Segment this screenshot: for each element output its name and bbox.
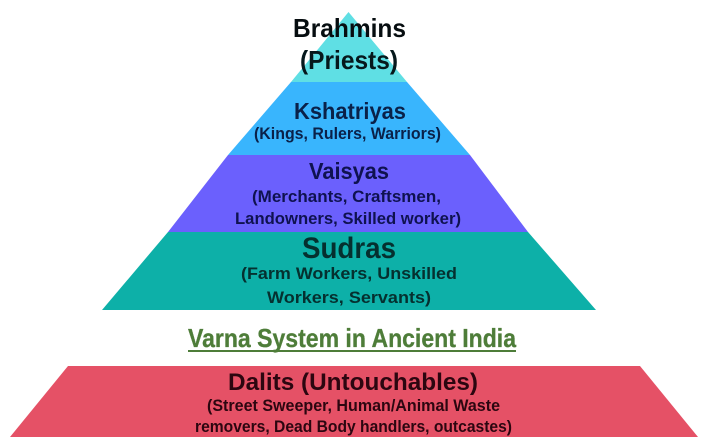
pyramid tier: Kshatriyas	[228, 82, 470, 155]
separate tier: Dalits: (Street Sweeper, Human/Animal Waste	[207, 397, 500, 415]
separate tier: Dalits: Dalits (Untouchables)	[228, 369, 478, 396]
pyramid tier: Brahmins: (Priests)	[300, 45, 398, 75]
pyramid tier: Vaisyas: (Merchants, Craftsmen,	[252, 188, 441, 206]
pyramid tier: Kshatriyas: (Kings, Rulers, Warriors)	[254, 125, 441, 143]
pyramid tier: Vaisyas: Landowners, Skilled worker)	[235, 210, 461, 228]
pyramid tier: Sudras: Sudras	[302, 232, 396, 265]
pyramid tier: Vaisyas: Vaisyas	[309, 158, 389, 184]
pyramid tier: Kshatriyas: Kshatriyas	[294, 98, 406, 124]
pyramid tier: Sudras: Workers, Servants)	[267, 288, 431, 307]
separate tier: Dalits	[10, 366, 698, 437]
pyramid tier: Brahmins: Brahmins	[293, 13, 406, 43]
pyramid tier: Sudras: (Farm Workers, Unskilled	[241, 264, 457, 283]
separate tier: Dalits: removers, Dead Body handlers, outcastes)	[195, 418, 512, 436]
pyramid tier: Brahmins	[291, 12, 407, 82]
pyramid tier: Vaisyas	[168, 155, 528, 232]
title: Varna System in Ancient India	[188, 323, 516, 353]
pyramid tier: Sudras	[102, 232, 596, 310]
